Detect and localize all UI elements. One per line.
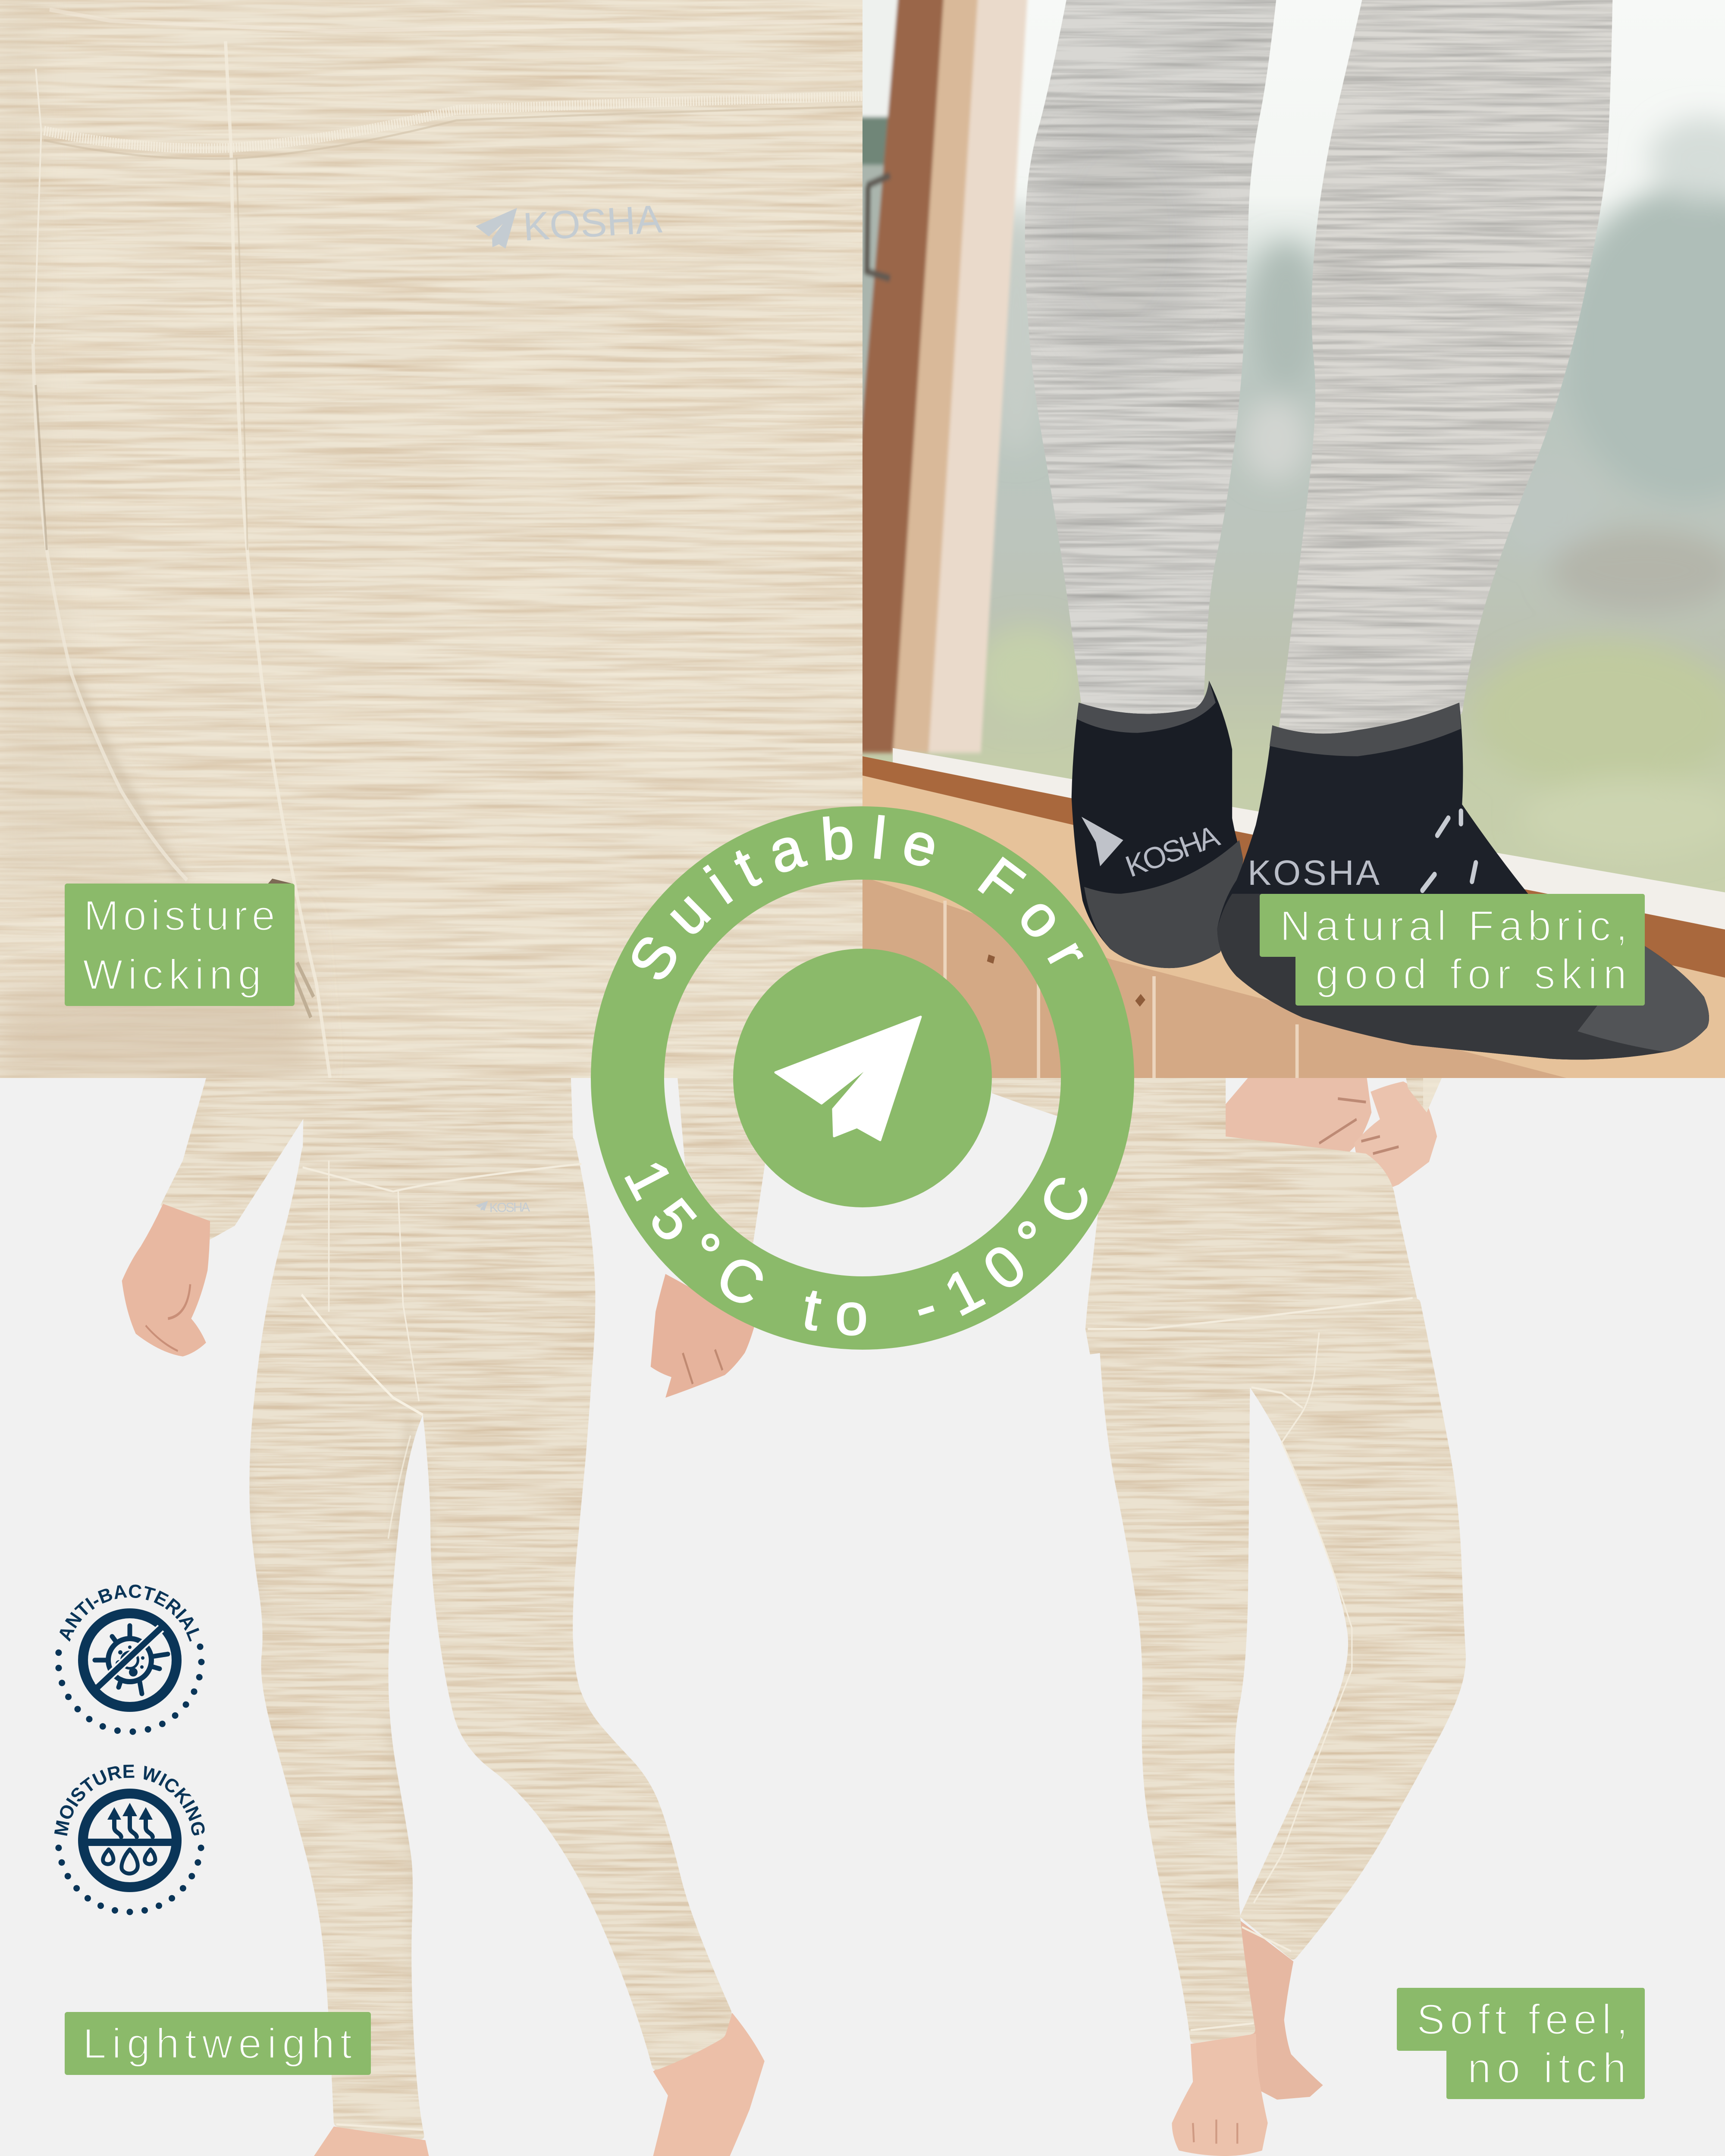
label: soft feel: Soft feel, <box>1417 1996 1628 2043</box>
green ring <box>627 843 1098 1313</box>
right figure shirt <box>992 1064 1466 1363</box>
right figure seams <box>1088 1298 1413 2030</box>
window view background <box>862 0 1725 976</box>
model photo: back view, right figure <box>992 1064 1518 2156</box>
label: lightweight <box>65 2012 371 2075</box>
label: moisture wicking: Wicking <box>83 951 261 998</box>
left figure left hand <box>122 1204 210 1357</box>
moisture arrows and drops symbol <box>83 1794 177 1887</box>
label: natural fabric: Natural Fabric, <box>1280 902 1628 950</box>
window sill and wood panelling <box>862 748 1725 1078</box>
window frame left <box>857 0 1028 753</box>
icon: paper plane <box>775 1017 921 1140</box>
right figure hands <box>1219 1071 1437 1192</box>
ring text bottom: 15°C to -10°C <box>612 1149 1113 1347</box>
label: soft feel <box>1399 1990 1643 2097</box>
label: natural fabric <box>1262 896 1643 1003</box>
kosha logo on fabric: KOSHA <box>522 197 663 249</box>
left grey leg <box>1018 0 1285 724</box>
icon: anti-bacterial badge <box>54 1580 206 1735</box>
panel: legs at window photo <box>857 0 1725 1078</box>
model photo: front view, left figure <box>122 1064 802 2156</box>
ring text top: Suitable For <box>616 804 1110 992</box>
icon: moisture wicking badge <box>50 1761 209 1915</box>
left figure seams <box>301 1160 581 2130</box>
right sock <box>1217 702 1709 1059</box>
label: natural fabric: good for skin <box>1315 950 1627 998</box>
label: soft feel: no itch <box>1468 2044 1626 2092</box>
right figure thermal pants <box>1087 1285 1518 2053</box>
dotted arc <box>55 1643 205 1735</box>
fabric heather streaks <box>0 0 862 1078</box>
virus crossed out symbol <box>83 1614 177 1707</box>
badge text moisture wicking: MOISTURE WICKING <box>50 1761 209 1838</box>
label: moisture wicking: Moisture <box>84 892 275 939</box>
right sock logo text: KOSHA <box>1248 853 1380 893</box>
panel: fabric close-up photo <box>0 0 862 1078</box>
left figure feet <box>314 2013 765 2156</box>
fabric shading and seams <box>0 0 862 1078</box>
left sock <box>1072 680 1243 968</box>
label: lightweight: Lightweight <box>83 2020 352 2067</box>
left sock logo text: KOSHA <box>1121 819 1224 884</box>
left figure kosha logo: KOSHA <box>489 1200 530 1215</box>
right figure feet <box>1172 1920 1323 2156</box>
badge: paper plane temperature ring <box>612 804 1113 1347</box>
left figure shirt torso and sleeves <box>155 1064 779 1250</box>
centre circle <box>733 949 992 1207</box>
dotted arc <box>55 1844 204 1915</box>
left figure thermal pants <box>235 1121 802 2156</box>
label: moisture wicking <box>65 884 295 1006</box>
right grey leg <box>1272 0 1617 746</box>
left figure right hand <box>651 1274 755 1398</box>
fabric base colour <box>0 0 862 1078</box>
badge text anti-bacterial: ANTI-BACTERIAL <box>54 1580 206 1644</box>
